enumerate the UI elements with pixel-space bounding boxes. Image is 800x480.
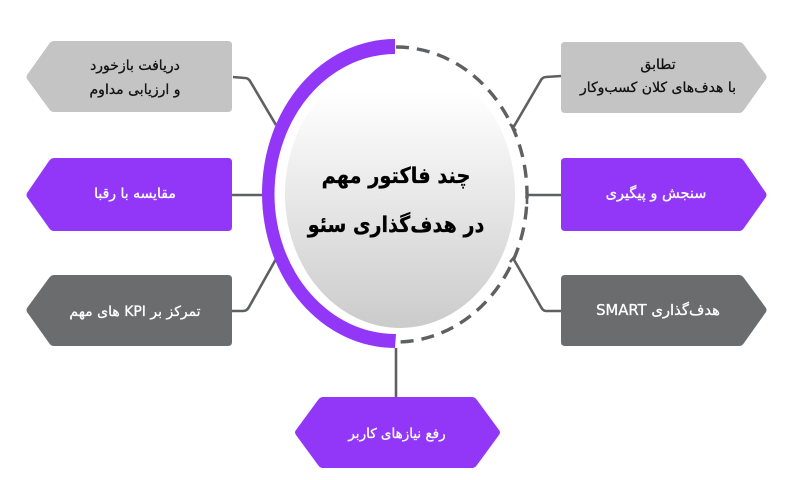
purple arc [262,39,396,348]
box: continuous feedback: دریافت بازخورد [90,58,180,74]
box: user needs [295,397,500,468]
box: competitor comparison [26,158,232,231]
title: چند فاکتور مهم [322,163,470,188]
title: در هدف‌گذاری سئو [307,212,484,237]
connector: middle left [232,194,263,196]
box: continuous feedback [26,41,232,112]
box: business goal alignment: تطابق [640,57,676,73]
box: measurement and follow-up [561,158,766,231]
connector: lower left [232,259,276,311]
box: KPI focus: تمرکز بر KPI های مهم [69,304,201,320]
box: SMART goal setting [561,275,766,346]
box: competitor comparison: مقایسه با رقبا [94,186,176,202]
box: continuous feedback: و ارزیابی مداوم [90,82,180,98]
box: business goal alignment [561,42,766,113]
dashed ring [396,47,527,342]
connector: bottom [395,348,397,397]
center circle [285,60,515,328]
box: SMART goal setting: هدف‌گذاری SMART [596,301,720,319]
connector: lower right [510,255,561,311]
title [307,163,484,237]
connector: top left [233,77,276,125]
box: KPI focus [26,275,232,346]
connector: middle right [527,186,561,204]
box: user needs: رفع نیازهای کاربر [347,426,446,442]
connector: top right [510,76,561,131]
box: measurement and follow-up: سنجش و پیگیری [606,185,706,202]
box: business goal alignment: با هدف‌های کلان کسب‌وکار [579,80,736,96]
